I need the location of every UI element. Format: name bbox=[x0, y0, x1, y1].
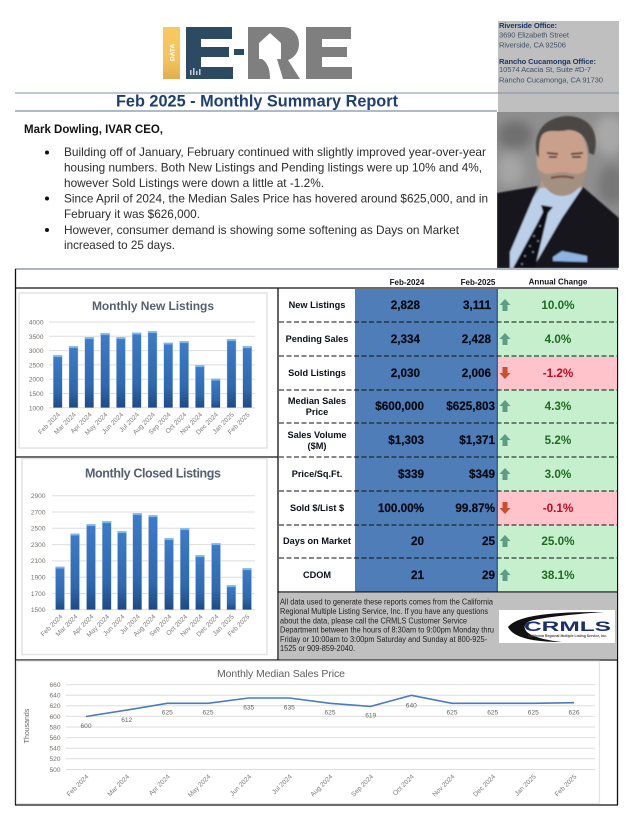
x axis labels: Feb 2025 bbox=[554, 773, 579, 798]
summary table bbox=[278, 278, 618, 592]
y axis labels: 2300 bbox=[31, 542, 46, 549]
row: sold listings: 2,006 bbox=[462, 367, 491, 380]
row: days on market: 25 bbox=[482, 535, 495, 548]
data labels bbox=[80, 702, 580, 730]
x axis labels: Oct 2024 bbox=[164, 411, 189, 435]
riverside office bbox=[499, 21, 570, 50]
x axis labels: Sep 2024 bbox=[148, 411, 173, 436]
row: price per square foot: $339 bbox=[398, 468, 424, 481]
row: sold listings bbox=[288, 367, 574, 380]
data labels: 635 bbox=[284, 704, 295, 712]
column headers: Feb-2024 bbox=[390, 278, 425, 287]
column headers bbox=[390, 278, 588, 287]
data labels: 625 bbox=[446, 710, 458, 716]
riverside office: Riverside, CA 92506 bbox=[499, 41, 566, 50]
y axis labels: 640 bbox=[49, 693, 61, 700]
data labels: 612 bbox=[121, 717, 133, 724]
x axis labels: Mar 2024 bbox=[55, 613, 80, 638]
x axis labels: Aug 2024 bbox=[309, 773, 335, 798]
data labels: 600 bbox=[80, 723, 92, 730]
face bbox=[536, 129, 588, 174]
x axis labels: May 2024 bbox=[86, 613, 111, 639]
row: new listings: 10.0% bbox=[541, 299, 575, 312]
row: CDOM bbox=[303, 569, 575, 582]
suit right bbox=[533, 187, 619, 268]
logo: gold data tab bbox=[163, 27, 180, 79]
x axis labels: Jan 2025 bbox=[212, 411, 236, 436]
row: median sales price: Price bbox=[306, 407, 328, 417]
data labels: 625 bbox=[202, 710, 214, 716]
x axis labels: Jan 2025 bbox=[212, 613, 236, 638]
y axis labels: 2500 bbox=[29, 362, 44, 369]
riverside office: 3690 Elizabeth Street bbox=[499, 31, 570, 40]
y axis labels: 520 bbox=[49, 756, 61, 763]
x axis labels: Oct 2024 bbox=[392, 773, 416, 797]
y axis labels: 4000 bbox=[29, 320, 44, 326]
bullet one: however Sold Listings were down a little at -1.2%. bbox=[64, 176, 324, 190]
shirt bbox=[510, 188, 582, 268]
report frame bbox=[15, 269, 618, 805]
row: days on market bbox=[283, 535, 575, 548]
y axis title: Thousands bbox=[24, 708, 31, 743]
panel: monthly new listings chart bbox=[19, 293, 267, 448]
y axis labels: 500 bbox=[49, 767, 61, 774]
row: price per square foot bbox=[292, 468, 572, 481]
x axis labels: Oct 2024 bbox=[165, 613, 189, 637]
disclaimer text: 1525 or 909-859-2040. bbox=[280, 644, 355, 653]
x axis labels: Feb 2024 bbox=[37, 411, 62, 436]
logo: E-RE data bbox=[163, 27, 352, 79]
logo: gold data tab: DATA bbox=[170, 44, 176, 61]
y axis labels: 580 bbox=[49, 724, 61, 731]
bars bbox=[56, 513, 252, 610]
title: Feb 2025 - Monthly Summary Report bbox=[116, 92, 398, 110]
row: sales volume bbox=[287, 430, 572, 451]
y axis labels: 560 bbox=[49, 735, 61, 742]
green change column background bbox=[498, 289, 617, 592]
hair bbox=[536, 116, 596, 158]
CEO photo bbox=[496, 112, 626, 268]
x axis labels bbox=[40, 613, 252, 639]
y axis labels: 1500 bbox=[29, 391, 44, 398]
x axis labels bbox=[66, 773, 579, 799]
x axis labels: May 2024 bbox=[84, 411, 110, 437]
x axis labels: Jul 2024 bbox=[118, 411, 141, 434]
x axis labels: Jan 2025 bbox=[514, 773, 538, 798]
y axis labels: 1700 bbox=[31, 591, 46, 598]
row: sold to list bbox=[290, 502, 574, 515]
row: sold listings: Sold Listings bbox=[288, 368, 346, 378]
row: sales volume: ($M) bbox=[308, 441, 326, 451]
y axis labels: 540 bbox=[49, 746, 61, 753]
x axis labels: May 2024 bbox=[187, 773, 213, 799]
bullet one: housing numbers. Both New Listings and Pending listings were up 10% and 4%, bbox=[64, 160, 482, 174]
chart title: Monthly New Listings bbox=[92, 299, 214, 313]
x axis labels: Mar 2024 bbox=[53, 411, 78, 436]
disclaimer text: about the data, please call the CRMLS Customer Service bbox=[280, 616, 467, 626]
data source footer panel bbox=[279, 593, 617, 660]
panel: monthly closed listings chart bbox=[22, 458, 267, 654]
author heading: Mark Dowling, IVAR CEO, bbox=[24, 124, 163, 136]
x axis labels: Nov 2024 bbox=[431, 773, 457, 798]
row: sales volume: Sales Volume bbox=[287, 430, 347, 440]
bullet three: increased to 25 days. bbox=[64, 238, 175, 252]
x axis labels: Jun 2024 bbox=[102, 613, 127, 638]
CRMLS logo bbox=[499, 610, 615, 643]
x axis labels: Feb 2025 bbox=[227, 613, 252, 638]
suit left bbox=[497, 186, 538, 268]
column headers: Annual Change bbox=[529, 278, 588, 286]
y axis labels bbox=[31, 493, 46, 614]
data labels: 625 bbox=[162, 710, 173, 716]
y axis labels: 1000 bbox=[29, 405, 44, 412]
x axis labels: Feb 2025 bbox=[227, 411, 252, 436]
data labels: 640 bbox=[406, 702, 417, 710]
tie bbox=[513, 205, 553, 268]
logo: navy letter E bbox=[186, 27, 233, 79]
x axis labels bbox=[37, 411, 252, 437]
y axis labels: 2500 bbox=[31, 526, 46, 533]
x axis labels: Nov 2024 bbox=[179, 411, 204, 436]
x axis labels: Sep 2024 bbox=[148, 613, 174, 638]
data labels: 625 bbox=[324, 710, 336, 716]
bullet two: February it was $626,000. bbox=[64, 207, 200, 221]
y axis labels: 3000 bbox=[29, 348, 44, 355]
row: median sales price bbox=[288, 396, 572, 417]
row: sales volume: 5.2% bbox=[545, 434, 572, 447]
column headers: Feb-2025 bbox=[461, 278, 496, 287]
x axis labels: Dec 2024 bbox=[472, 773, 497, 798]
row: new listings bbox=[289, 299, 575, 312]
y axis labels: 3500 bbox=[29, 334, 44, 341]
y axis labels: 660 bbox=[49, 682, 61, 689]
y axis labels: 2000 bbox=[29, 377, 44, 384]
CRMLS logo: CRMLS bbox=[524, 619, 611, 634]
x axis labels: Dec 2024 bbox=[195, 411, 220, 436]
panel: monthly median sales price chart bbox=[16, 661, 600, 804]
logo: letter E grey bbox=[306, 27, 352, 79]
row: median sales price: $625,803 bbox=[446, 400, 495, 413]
y axis labels: 620 bbox=[49, 703, 61, 710]
x axis labels: Jun 2024 bbox=[101, 411, 125, 436]
row: sold to list: Sold $/List $ bbox=[290, 503, 344, 513]
x axis labels: Feb 2024 bbox=[40, 613, 65, 638]
blue value column background bbox=[355, 289, 497, 592]
neck bbox=[540, 180, 583, 190]
bars bbox=[53, 331, 252, 408]
x axis labels: Apr 2024 bbox=[72, 613, 96, 637]
logo: letter R with house bbox=[248, 27, 300, 79]
rancho cucamonga office: 10574 Acacia St, Suite #D-7 bbox=[499, 65, 591, 74]
row: price per square foot: $349 bbox=[469, 468, 495, 481]
row: pending sales: 2,334 bbox=[391, 333, 420, 346]
row: sales volume: $1,303 bbox=[388, 434, 424, 447]
row: days on market: 25.0% bbox=[541, 535, 575, 548]
x axis labels: Aug 2024 bbox=[132, 411, 157, 436]
disclaimer text: Department between the hours of 8:30am to 9:00pm Monday thru bbox=[280, 626, 494, 634]
row: pending sales: 4.0% bbox=[545, 333, 572, 346]
row: price per square foot: 3.0% bbox=[545, 468, 572, 481]
row: CDOM: CDOM bbox=[303, 570, 331, 580]
price line bbox=[86, 695, 574, 716]
x axis labels: Dec 2024 bbox=[195, 613, 221, 638]
logo: dash bbox=[234, 49, 244, 55]
disclaimer text: Regional Multiple Listing Service, Inc. If you have any questions bbox=[280, 607, 488, 616]
y axis labels bbox=[49, 682, 61, 774]
row: sales volume: $1,371 bbox=[459, 434, 495, 447]
row: sold listings: 2,030 bbox=[391, 367, 420, 380]
row: CDOM: 38.1% bbox=[541, 569, 575, 582]
x axis labels: Feb 2024 bbox=[66, 773, 91, 798]
data labels: 626 bbox=[568, 710, 580, 716]
rancho cucamonga office: Rancho Cucamonga, CA 91730 bbox=[499, 76, 603, 85]
data labels: 619 bbox=[365, 712, 377, 720]
row: median sales price: 4.3% bbox=[545, 400, 572, 413]
disclaimer text: All data used to generate these reports comes from the California bbox=[280, 598, 494, 606]
x axis labels: Jul 2024 bbox=[119, 613, 142, 636]
row: CDOM: 21 bbox=[411, 569, 424, 582]
row: new listings: 3,111 bbox=[463, 299, 491, 312]
CEO commentary bbox=[24, 124, 488, 252]
y axis labels: 1900 bbox=[31, 574, 46, 582]
bullet three: However, consumer demand is showing some softening as Days on Market bbox=[64, 223, 460, 237]
bullet two bbox=[64, 192, 488, 221]
row: days on market: 20 bbox=[411, 535, 424, 548]
row: sold to list: 100.00% bbox=[378, 502, 425, 515]
x axis labels: Apr 2024 bbox=[148, 773, 172, 797]
x axis labels: Nov 2024 bbox=[179, 613, 205, 638]
row: price per square foot: Price/Sq.Ft. bbox=[292, 469, 342, 479]
y axis labels: 1500 bbox=[31, 607, 46, 614]
bullet two: Since April of 2024, the Median Sales Price has hovered around $625,000, and in bbox=[64, 192, 488, 206]
riverside office: Riverside Office: bbox=[499, 21, 557, 30]
disclaimer text bbox=[280, 598, 494, 653]
row: pending sales: 2,428 bbox=[462, 333, 491, 346]
x axis labels: Mar 2024 bbox=[106, 773, 131, 798]
row: pending sales bbox=[286, 333, 572, 346]
x axis labels: Jun 2024 bbox=[229, 773, 253, 798]
row: pending sales: Pending Sales bbox=[286, 334, 348, 344]
row: new listings: 2,828 bbox=[391, 299, 420, 312]
chart title: Monthly Closed Listings bbox=[85, 466, 221, 480]
red change cells bbox=[498, 357, 617, 525]
office addresses panel bbox=[498, 21, 619, 112]
bullet dots bbox=[45, 150, 49, 232]
bullet one bbox=[64, 145, 486, 190]
row: days on market: Days on Market bbox=[283, 536, 351, 546]
bullet three bbox=[64, 223, 460, 252]
data labels: 635 bbox=[243, 704, 255, 712]
row: sold listings: -1.2% bbox=[543, 367, 574, 380]
chart title: Monthly Median Sales Price bbox=[217, 668, 345, 680]
x axis labels: Jul 2024 bbox=[271, 773, 294, 796]
data labels: 625 bbox=[528, 710, 539, 716]
pocket square bbox=[553, 251, 587, 262]
y axis labels: 2700 bbox=[31, 509, 46, 516]
row: new listings: New Listings bbox=[289, 300, 345, 310]
CRMLS logo: California Regional Multiple Listing Service, Inc. bbox=[528, 634, 607, 638]
x axis labels: Aug 2024 bbox=[132, 613, 158, 638]
row: CDOM: 29 bbox=[482, 569, 495, 582]
disclaimer text: Friday or 10:00am to 3:00pm Saturday and Sunday at 800-925- bbox=[280, 635, 487, 644]
y axis labels bbox=[29, 320, 44, 412]
x axis labels: Apr 2024 bbox=[70, 411, 94, 435]
row: median sales price: $600,000 bbox=[375, 400, 424, 413]
rancho cucamonga office bbox=[499, 57, 603, 85]
rancho cucamonga office: Rancho Cucamonga Office: bbox=[499, 57, 596, 66]
bullet one: Building off of January, February continued with slightly improved year-over-year bbox=[64, 145, 486, 159]
row: sold to list: 99.87% bbox=[455, 502, 496, 515]
data labels: 625 bbox=[487, 710, 499, 716]
row: sold to list: -0.1% bbox=[543, 502, 574, 515]
y axis labels: 2900 bbox=[31, 493, 46, 500]
x axis labels: Sep 2024 bbox=[350, 773, 375, 798]
y axis labels: 600 bbox=[49, 714, 61, 721]
row: median sales price: Median Sales bbox=[288, 396, 346, 406]
logo: small chart icon bbox=[190, 68, 200, 75]
y axis labels: 2100 bbox=[31, 558, 46, 565]
